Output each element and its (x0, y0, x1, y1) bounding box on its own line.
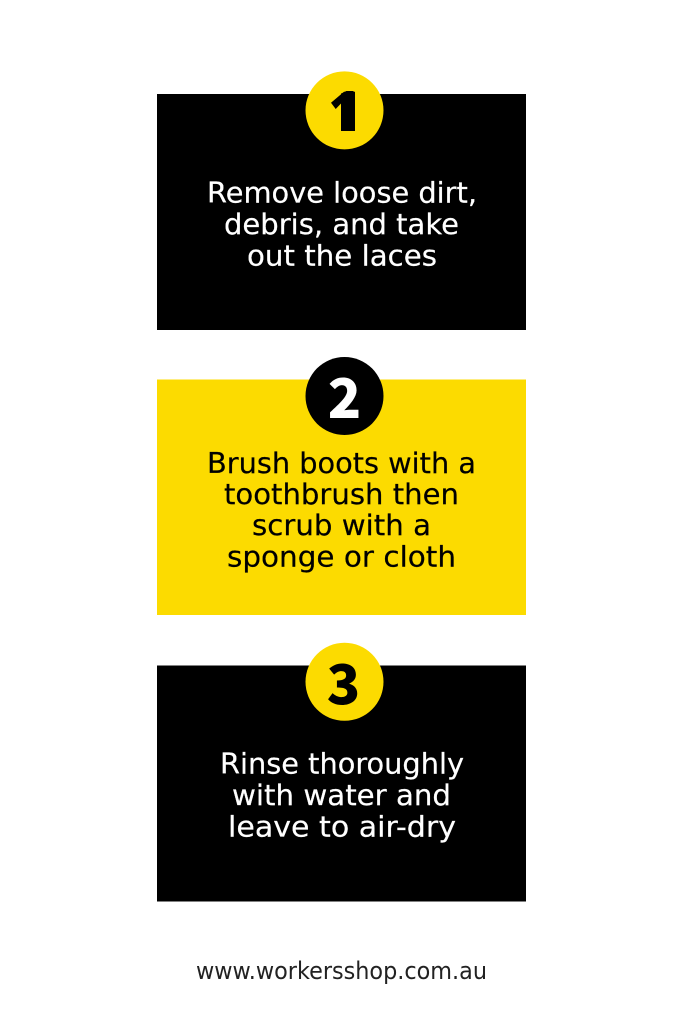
text: step 1: Remove loose dirt, (207, 176, 477, 210)
number badge 1 (306, 67, 384, 149)
text: step 2: Brush boots with a (207, 447, 476, 480)
panel: step 2 (157, 354, 526, 615)
text: step 2: sponge or cloth (227, 540, 456, 574)
text: step 3 (220, 748, 464, 844)
text: step 2 (207, 447, 476, 574)
text: step 2: toothbrush then (224, 478, 459, 511)
number badge 2 (306, 354, 384, 435)
text: step 3: with water and (232, 779, 451, 812)
text: step 3: Rinse thoroughly (220, 748, 464, 780)
text: step 2: scrub with a (252, 509, 431, 542)
text: step 1: debris, and take (224, 208, 459, 241)
number badge 3: 3 (327, 640, 360, 720)
text: step 1: out the laces (247, 240, 437, 272)
number badge 3 (306, 640, 384, 721)
text: step 1 (207, 176, 477, 272)
text: step 3: leave to air-dry (228, 810, 456, 844)
panel: step 1 (157, 67, 526, 330)
panel: step 3 (157, 640, 526, 902)
number badge 1: 1 (331, 67, 364, 147)
website url: www.workersshop.com.au (196, 957, 487, 985)
number badge 2: 2 (328, 354, 361, 434)
